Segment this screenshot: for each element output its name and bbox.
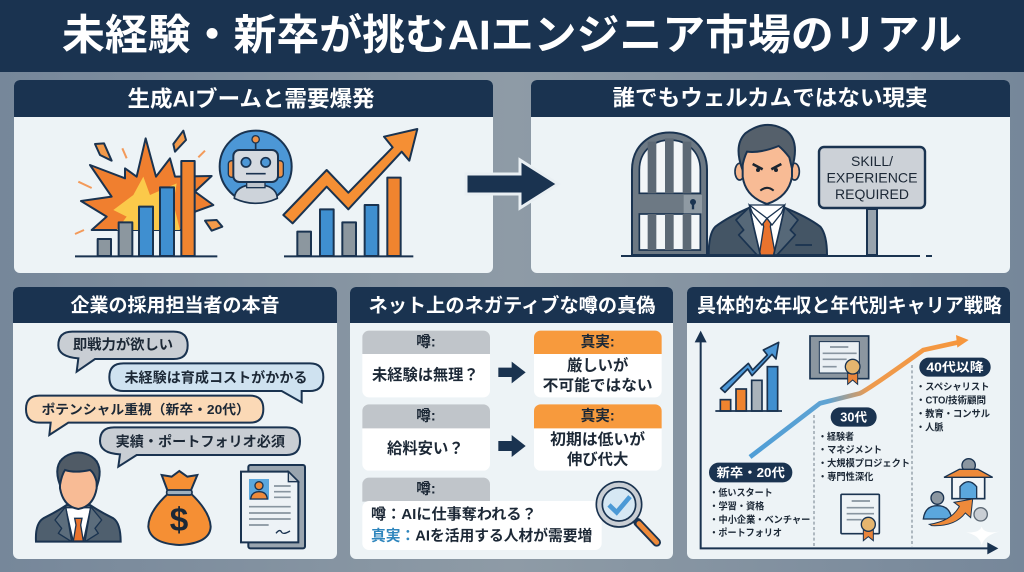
heading: career: 具体的な年収と年代別キャリア戦略 [697, 294, 1002, 317]
panel: generative AI boom [14, 80, 493, 273]
icon: growth bar chart with arrow [283, 129, 417, 256]
rumor card 3 [362, 478, 602, 550]
bubble: training cost: 未経験は育成コストがかかる [124, 369, 307, 385]
stage: 20s: ・中小企業・ベンチャー [709, 514, 810, 526]
bubble: immediate skills: 即戦力が欲しい [73, 335, 173, 353]
stage: 30s: ・経験者 [818, 431, 854, 443]
rumor card 1: 未経験は無理？ [372, 366, 479, 384]
icon: certificate [810, 336, 869, 384]
icon: requirement sign: EXPERIENCE [826, 170, 918, 186]
icon: stern interviewer [709, 125, 827, 255]
icon: barred door [632, 132, 707, 255]
title banner [0, 0, 1024, 72]
icon: document with seal [841, 494, 879, 541]
icon: money bag [148, 471, 211, 545]
icon: requirement sign [819, 147, 925, 255]
stage: 20s: ・ポートフォリオ [709, 528, 782, 539]
truth card 2: 初期は低いが [550, 430, 646, 448]
truth card 1: 厳しいが [567, 356, 629, 374]
stage: 20s: ・学習・資格 [709, 500, 765, 512]
panel: recruiter real intentions [13, 287, 337, 559]
stage: 30s: ・マネジメント [818, 445, 882, 456]
career growth curve [750, 335, 969, 457]
panel: harsh reality [531, 80, 1010, 273]
stage: 30s: ・大規模プロジェクト [818, 457, 910, 469]
truth card 2 [534, 404, 662, 471]
icon: recruiter [36, 452, 121, 542]
icon: money bag: $ [170, 502, 189, 539]
rumor card 3: 噂: [416, 481, 436, 498]
truth card 1: 真実: [581, 332, 615, 350]
sign text: SKILL/ [851, 153, 893, 169]
stage: 40s and up: 40代以降 [926, 360, 984, 375]
stage: 30s: ・専門性深化 [818, 471, 874, 483]
rumor card 2: 給料安い？ [387, 439, 464, 457]
icon: robot [220, 131, 292, 203]
stage: 20s: 新卒・20代 [716, 465, 785, 480]
arrow: boom to reality [466, 160, 558, 208]
rumor card 1 [362, 331, 490, 397]
truth card 2: 伸び代大 [567, 450, 628, 468]
stage: 30s: 30代 [840, 411, 867, 425]
icon: resume document [241, 465, 305, 548]
icon: explosion bar chart [75, 131, 222, 256]
truth card 1: 不可能ではない [543, 376, 653, 394]
rumor card 3: 噂：AIに仕事奪われる？ [371, 505, 537, 523]
bubble: portfolio: 実績・ポートフォリオ必須 [116, 433, 285, 449]
stage: 40s and up: ・教育・コンサル [916, 408, 990, 420]
stage: 40s and up: ・スペシャリスト [916, 382, 989, 393]
rumor card 2: 噂: [416, 407, 436, 424]
panel: salary and career strategy [687, 287, 1010, 559]
bubble: potential [26, 396, 263, 435]
chart axes [695, 331, 998, 554]
heading: recruiter: 企業の採用担当者の本音 [70, 294, 280, 316]
bubble: training cost [109, 363, 323, 402]
heading: boom: 生成AIブームと需要爆発 [128, 86, 374, 112]
icon: magnifying glass [596, 482, 657, 542]
arrow 1 [498, 362, 526, 383]
truth card 2: 真実: [581, 406, 615, 424]
icon: house and people [923, 459, 999, 545]
truth card 1 [534, 331, 662, 397]
stage: 40s and up [916, 358, 991, 433]
stage: 40s and up: ・CTO/技術顧問 [916, 394, 986, 406]
rumor card 2 [362, 404, 490, 471]
callouts: speech bubbles [26, 332, 323, 467]
panel: rumor fact check [350, 287, 673, 559]
heading: reality: 誰でもウェルカムではない現実 [612, 86, 928, 110]
arrow 2 [498, 435, 526, 457]
icon: growth chart [715, 342, 782, 411]
bubble: potential: ポテンシャル重視（新卒・20代） [41, 401, 250, 417]
heading: rumors: ネット上のネガティブな噂の真偽 [368, 294, 656, 317]
stage: 30s [818, 407, 910, 483]
bubble: portfolio [100, 427, 300, 467]
title: 未経験・新卒が挑むAIエンジニア市場のリアル [62, 12, 962, 58]
icon: requirement sign: REQUIRED [835, 186, 909, 202]
stage: 20s: ・低いスタート [709, 487, 773, 499]
bubble: immediate skills [58, 332, 188, 372]
rumor card 3: 真実：AIを活用する人材が需要増 [371, 527, 592, 545]
rumor card 1: 噂: [416, 333, 436, 350]
stage: 40s and up: ・人脈 [916, 421, 944, 433]
stage: 20s [709, 463, 810, 539]
